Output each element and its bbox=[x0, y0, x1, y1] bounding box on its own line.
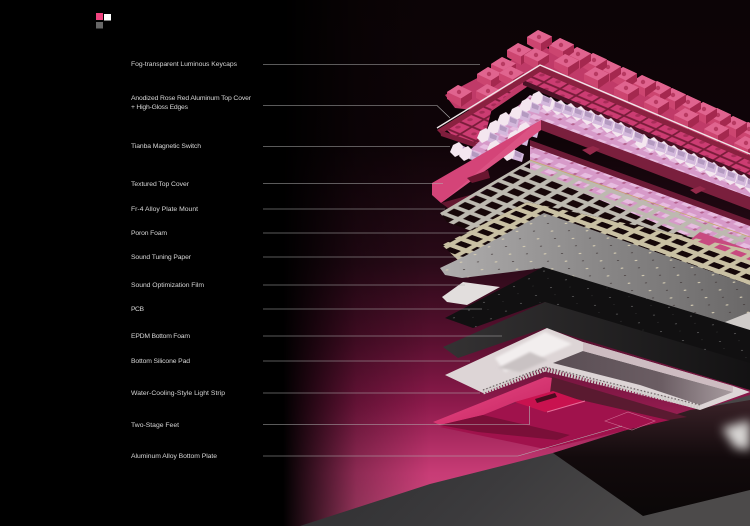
label: textured top cover: Textured Top Cover bbox=[131, 181, 190, 188]
layer: bottom silicone pad bbox=[445, 328, 750, 410]
label: top cover: Anodized Rose Red Aluminum Top Cover bbox=[131, 95, 252, 102]
label: top cover: + High-Gloss Edges bbox=[131, 104, 189, 111]
label: pcb: PCB bbox=[131, 306, 144, 313]
layer: fr-4 plate bbox=[440, 160, 750, 300]
label: top cover bbox=[131, 95, 450, 118]
label: plate mount: Fr-4 Alloy Plate Mount bbox=[131, 206, 198, 213]
label: poron foam: Poron Foam bbox=[131, 230, 167, 237]
layer: keycaps bbox=[445, 30, 750, 170]
label: feet: Two-Stage Feet bbox=[131, 422, 179, 429]
label: keycaps: Fog-transparent Luminous Keycaps bbox=[131, 61, 238, 68]
label: bottom foam: EPDM Bottom Foam bbox=[131, 333, 190, 340]
layer: poron foam bbox=[442, 202, 750, 300]
label: optimization film: Sound Optimization Film bbox=[131, 282, 204, 289]
layer: sound tuning paper bbox=[440, 213, 750, 332]
label: switch: Tianba Magnetic Switch bbox=[131, 143, 201, 150]
layer: water-cooling light strip bbox=[483, 367, 700, 407]
logo bbox=[96, 13, 111, 28]
layer: anodized top cover bbox=[437, 65, 750, 179]
layer: pcb bbox=[445, 267, 750, 385]
layer: magnetic switches bbox=[450, 91, 750, 200]
label: bottom plate bbox=[131, 426, 622, 460]
layer: aluminum bottom plate bbox=[433, 377, 687, 448]
layer: sound optimization film bbox=[442, 282, 750, 331]
label: silicone pad: Bottom Silicone Pad bbox=[131, 358, 190, 365]
label: tuning paper: Sound Tuning Paper bbox=[131, 254, 192, 261]
base surface bbox=[300, 395, 750, 526]
label: bottom plate: Aluminum Alloy Bottom Plate bbox=[131, 453, 217, 460]
layer: epdm bottom foam bbox=[443, 302, 750, 390]
label: light strip: Water-Cooling-Style Light Strip bbox=[131, 390, 225, 397]
layer: textured top cover bbox=[432, 120, 750, 262]
label: feet bbox=[131, 406, 530, 429]
